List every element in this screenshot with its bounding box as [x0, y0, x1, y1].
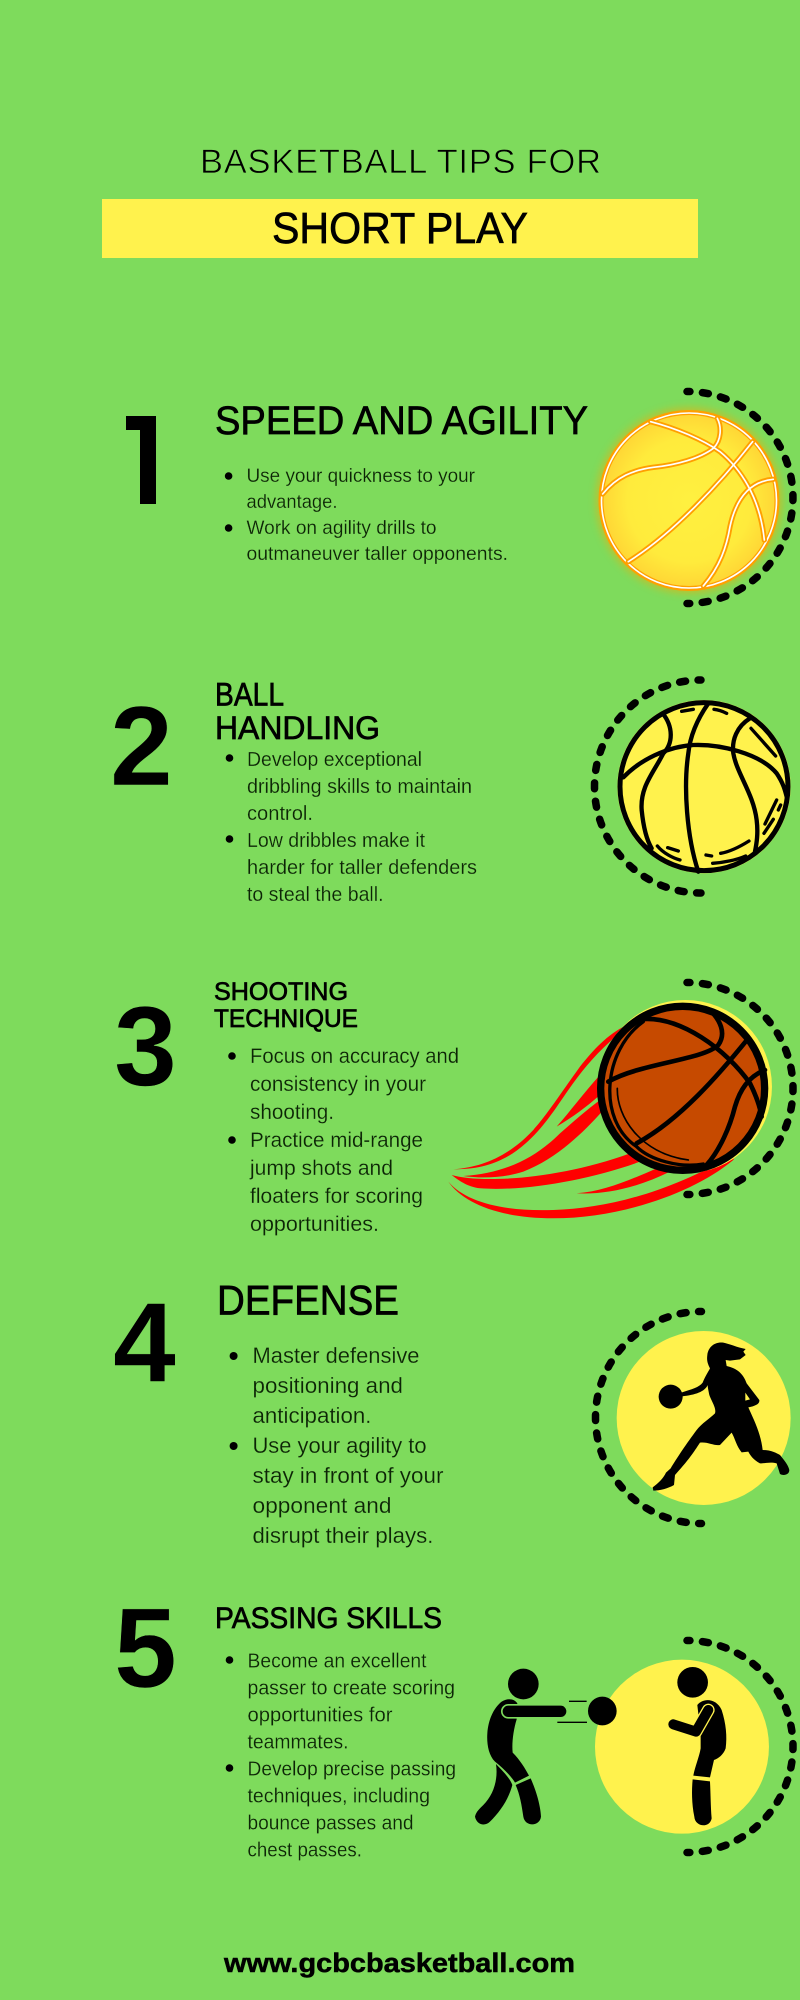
icon: neon basketball	[596, 408, 782, 594]
number 1: 1	[112, 402, 175, 528]
dashed arc 4	[596, 1312, 702, 1524]
section 5: passing skills	[114, 1585, 793, 1862]
section 4: defense	[113, 1276, 791, 1548]
bullets 1	[225, 465, 508, 565]
number 4: 4	[113, 1280, 176, 1406]
infographic canvas	[102, 150, 797, 1978]
bullets 2: Develop exceptional	[247, 749, 422, 771]
number 1	[126, 416, 156, 504]
dashed arc 3	[687, 982, 793, 1194]
title line: basketball tips for: BASKETBALL TIPS FOR	[200, 143, 601, 181]
heading 3: TECHNIQUE	[214, 1005, 358, 1033]
bullets 1: outmaneuver taller opponents.	[246, 543, 508, 565]
heading 4: DEFENSE	[217, 1276, 399, 1324]
heading 1: SPEED AND AGILITY	[215, 399, 588, 443]
section 3: shooting technique	[114, 978, 793, 1236]
bullets 5: Become an excellent	[248, 1650, 427, 1672]
bullets 4: Master defensive	[252, 1343, 420, 1368]
bullets 2: dribbling skills to maintain	[247, 776, 472, 798]
bullets 3: Practice mid-range	[250, 1129, 423, 1152]
number 5: 5	[114, 1585, 177, 1711]
bullets 4	[230, 1343, 444, 1548]
bullets 5: opportunities for	[248, 1704, 393, 1726]
dashed arc 1	[687, 392, 793, 604]
passed ball	[557, 1697, 617, 1725]
footer website: www.gcbcbasketball.com	[223, 1948, 575, 1978]
bullets 4: positioning and	[252, 1373, 403, 1398]
heading 5: PASSING SKILLS	[215, 1602, 442, 1635]
dashed arc 5	[687, 1640, 793, 1852]
bullets 2: Low dribbles make it	[247, 830, 425, 852]
bullets 3: floaters for scoring	[250, 1185, 423, 1208]
bullets 1: advantage.	[246, 491, 338, 513]
heading 2: HANDLING	[215, 710, 380, 746]
number 2: 2	[110, 683, 173, 809]
bullets 5: teammates.	[248, 1732, 348, 1754]
icon: player dribbling silhouette	[617, 1331, 791, 1505]
bullets 3: Focus on accuracy and	[250, 1045, 459, 1068]
passer figure	[475, 1669, 561, 1824]
bullets 3	[228, 1045, 459, 1236]
red flames	[448, 1025, 737, 1218]
bullets 5: Develop precise passing	[248, 1758, 456, 1780]
section 1: speed and agility	[112, 392, 793, 604]
bullets 1: Use your quickness to your	[246, 465, 475, 487]
bullets 4: disrupt their plays.	[252, 1523, 434, 1548]
bullets 4: anticipation.	[252, 1403, 372, 1428]
bullets 3: consistency in your	[250, 1073, 426, 1096]
dashed arc 2	[594, 680, 701, 893]
bullets 5: bounce passes and	[248, 1812, 414, 1834]
bullets 5	[226, 1650, 456, 1862]
title	[102, 143, 698, 258]
heading 3	[214, 978, 358, 1033]
bullets 2: to steal the ball.	[247, 884, 384, 906]
receiver figure	[673, 1667, 726, 1825]
bullets 3: shooting.	[250, 1101, 334, 1124]
bullets 5: techniques, including	[248, 1786, 430, 1808]
bullets 1: Work on agility drills to	[246, 517, 437, 539]
number 3: 3	[114, 983, 177, 1109]
bullets 2: control.	[247, 803, 313, 825]
bullets 4: stay in front of your	[252, 1463, 444, 1488]
bullets 4: opponent and	[252, 1493, 392, 1518]
heading 2: BALL	[215, 676, 284, 712]
bullets 2	[226, 749, 477, 906]
heading 3: SHOOTING	[214, 978, 348, 1006]
title banner	[102, 199, 698, 258]
bullets 5: chest passes.	[248, 1840, 362, 1862]
bullets 5: passer to create scoring	[248, 1678, 455, 1700]
bullets 3: jump shots and	[249, 1157, 393, 1180]
icon: two players passing	[475, 1660, 769, 1834]
bullets 4: Use your agility to	[252, 1433, 426, 1458]
icon: flaming basketball	[448, 1000, 772, 1218]
section 2: ball handling	[110, 676, 791, 906]
bullets 2: harder for taller defenders	[247, 857, 477, 879]
bullets 3: opportunities.	[250, 1213, 379, 1236]
heading 2	[215, 676, 380, 746]
title line: short play: SHORT PLAY	[272, 204, 528, 253]
icon: outlined yellow basketball	[617, 700, 791, 873]
